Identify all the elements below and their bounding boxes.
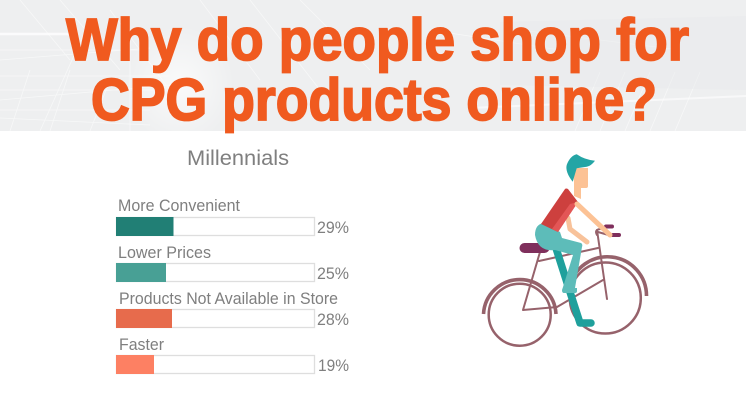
bar: Faster 19% xyxy=(116,336,349,375)
hair xyxy=(566,154,595,182)
front leg xyxy=(535,223,582,293)
bar: Lower Prices 25%: Lower Prices xyxy=(118,244,211,262)
title: CPG products online? xyxy=(91,67,657,133)
bar: Products Not Available in Store 28% xyxy=(116,290,349,329)
torso xyxy=(541,188,578,232)
bar: More Convenient 29%: More Convenient xyxy=(118,197,240,215)
bar: Faster 19%: Faster xyxy=(119,336,164,354)
front arm xyxy=(577,204,610,235)
title: Why do people shop for xyxy=(66,7,689,73)
header background: shopping carts xyxy=(0,0,746,145)
icon: bicycle xyxy=(484,226,647,346)
bicycle seat and grips xyxy=(524,226,619,248)
bar: Lower Prices 25%: 25% xyxy=(317,265,349,283)
bar: Products Not Available in Store 28%: 28% xyxy=(317,311,349,329)
bar: More Convenient 29%: 29% xyxy=(317,219,349,237)
bar chart xyxy=(116,197,349,375)
illustration: cyclist xyxy=(484,154,647,346)
back leg xyxy=(555,245,591,323)
bar: Faster 19%: 19% xyxy=(318,357,349,375)
bar: Products Not Available in Store 28%: Products Not Available in Store xyxy=(119,290,338,308)
chart heading: Millennials: Millennials xyxy=(187,147,289,170)
neck and face xyxy=(573,168,588,199)
bar: More Convenient 29% xyxy=(116,197,349,237)
back arm xyxy=(568,218,587,242)
bar: Lower Prices 25% xyxy=(116,244,349,283)
title xyxy=(66,7,689,133)
